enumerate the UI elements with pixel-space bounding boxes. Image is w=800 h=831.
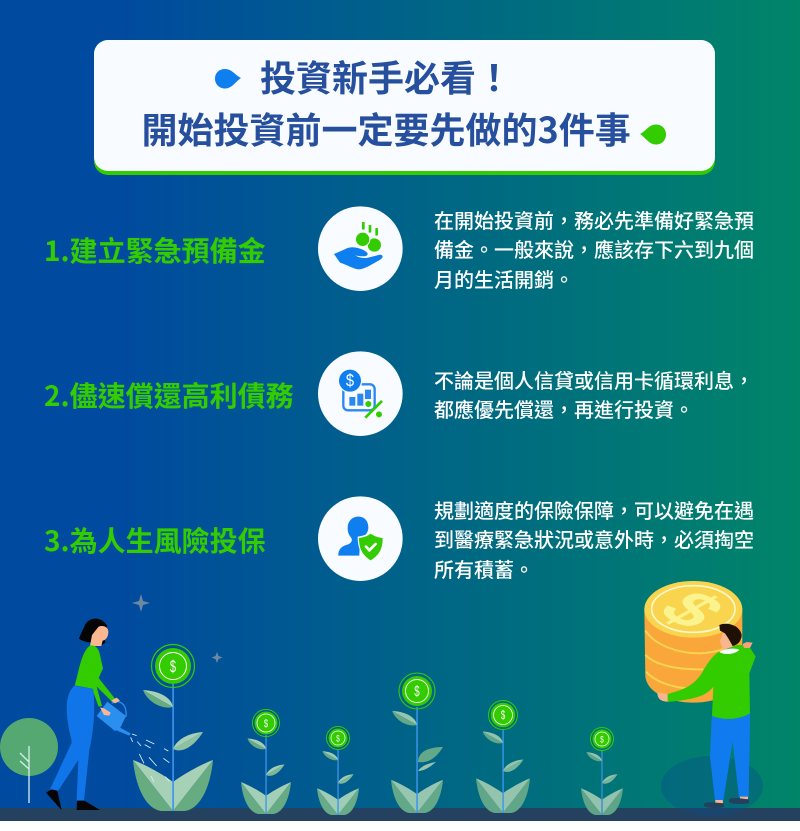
- heading 2: 2.儘速償還高利債務: [44, 375, 294, 415]
- icon: hand with coins: [318, 206, 403, 291]
- icon: chart with dollar and percent: [318, 351, 403, 436]
- text block 2: 都應優先償還，再進行投資。: [434, 394, 694, 423]
- text block 3: 到醫療緊急狀況或意外時，必須掏空: [434, 524, 754, 553]
- text block 3: 規劃適度的保險保障，可以避免在遇: [434, 495, 754, 524]
- title line 2: 開始投資前一定要先做的3件事: [142, 102, 631, 154]
- plant 4: [391, 673, 443, 813]
- icon: green drop: [640, 124, 666, 144]
- woman watering plant: [46, 619, 169, 810]
- text block 1: 在開始投資前，務必先準備好緊急預: [434, 205, 754, 234]
- plant 6: $: [600, 734, 604, 745]
- plant 6: [581, 728, 623, 815]
- star large: [132, 594, 150, 612]
- plant 5: $: [501, 710, 505, 723]
- star small: [212, 652, 222, 663]
- text block 2: [434, 365, 754, 423]
- plant 2: [241, 710, 291, 814]
- man carrying coin stack: [642, 581, 756, 808]
- plant 2: $: [264, 718, 269, 731]
- heading 3: 3.為人生風險投保: [44, 520, 266, 560]
- text block 3: 所有積蓄。: [434, 554, 534, 583]
- text block 1: 月的生活開銷。: [434, 264, 574, 293]
- text block 1: 備金。一般來說，應該存下六到九個: [434, 234, 754, 263]
- plant 3: $: [336, 733, 340, 744]
- text block 1: [434, 205, 754, 293]
- icon: blue drop: [215, 69, 241, 88]
- plant 1: $: [170, 658, 176, 677]
- plant 5: [476, 700, 530, 813]
- title line 1: 投資新手必看！: [260, 50, 512, 102]
- title card: [94, 40, 715, 175]
- ground: [0, 808, 800, 821]
- man's shadow: [661, 756, 763, 816]
- plant 3: [317, 726, 359, 815]
- plant 1: [133, 644, 213, 811]
- text block 2: 不論是個人信貸或信用卡循環利息，: [434, 365, 754, 394]
- icon: person with shield: [318, 496, 403, 581]
- plant 4: $: [414, 683, 420, 700]
- text block 3: [434, 495, 754, 583]
- heading 1: 1.建立緊急預備金: [44, 230, 266, 270]
- icon: chart with dollar and percent: $: [346, 372, 354, 391]
- tree: [0, 718, 58, 803]
- man carrying coin stack: $: [642, 581, 742, 638]
